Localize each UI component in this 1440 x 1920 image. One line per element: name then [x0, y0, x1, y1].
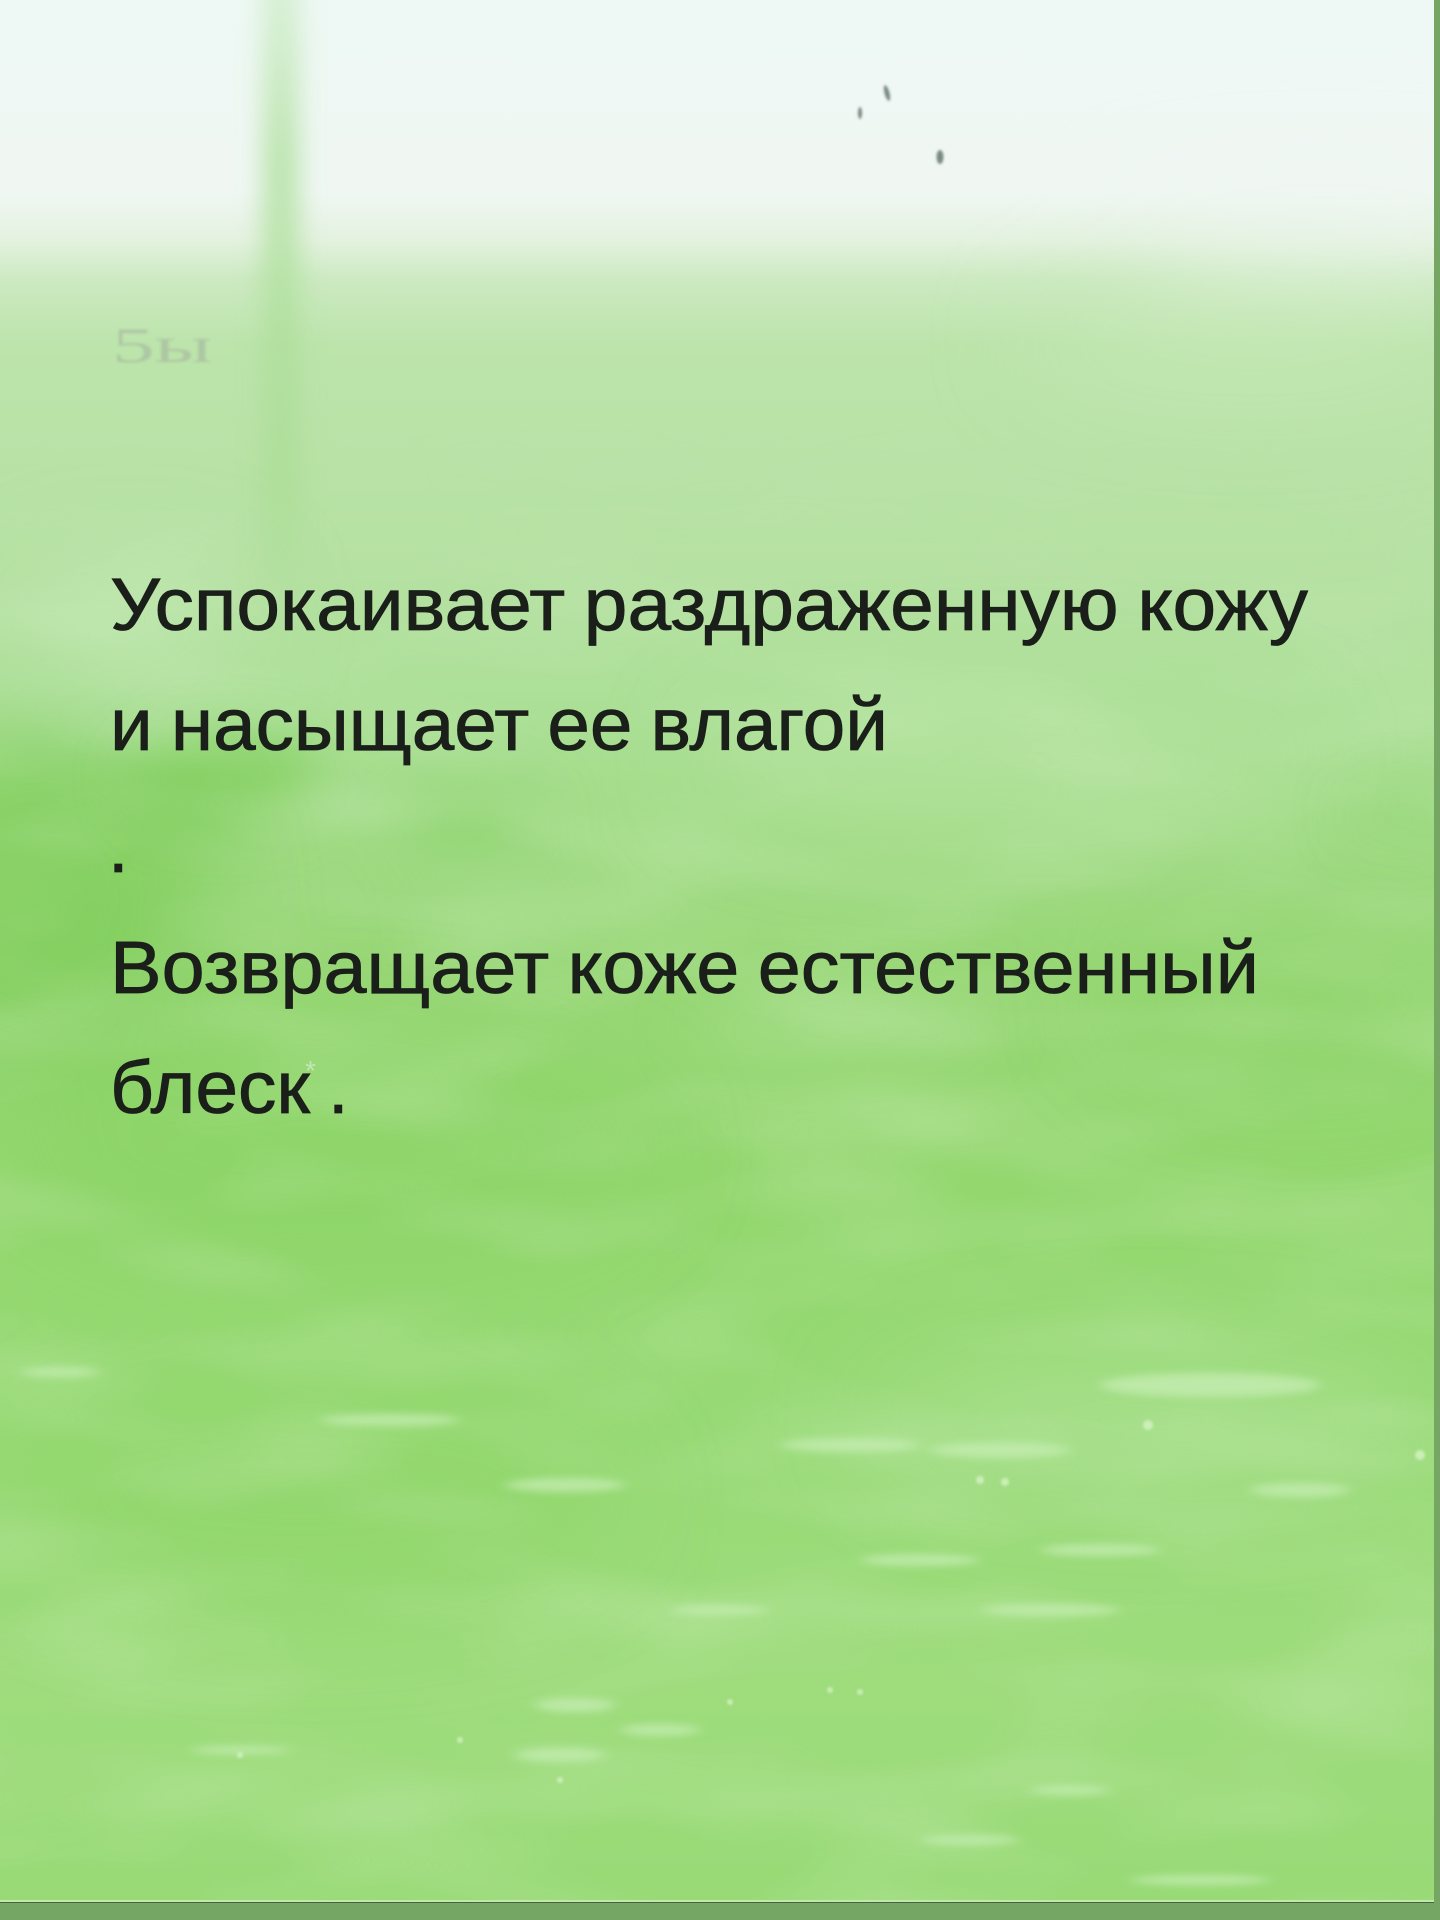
main text block	[108, 563, 1308, 1129]
line 1: Успокаивает раздраженную кожу	[110, 563, 1308, 646]
line 4: блеск	[110, 1046, 311, 1129]
faint watermark: 5ы	[112, 317, 212, 373]
line 2: и насыщает ее влагой	[110, 683, 888, 766]
mottled texture	[0, 696, 1434, 1900]
falling water stream	[262, 0, 300, 620]
asterisk: *	[305, 1055, 316, 1086]
separator dot: .	[108, 805, 129, 888]
final period: .	[328, 1046, 349, 1129]
right edge border	[1434, 0, 1440, 1920]
water droplets	[858, 85, 944, 164]
line 3: Возвращает коже естественный	[110, 926, 1259, 1009]
bubbles and ripples on water surface	[20, 1367, 1425, 1885]
bottom edge border	[0, 1900, 1440, 1920]
